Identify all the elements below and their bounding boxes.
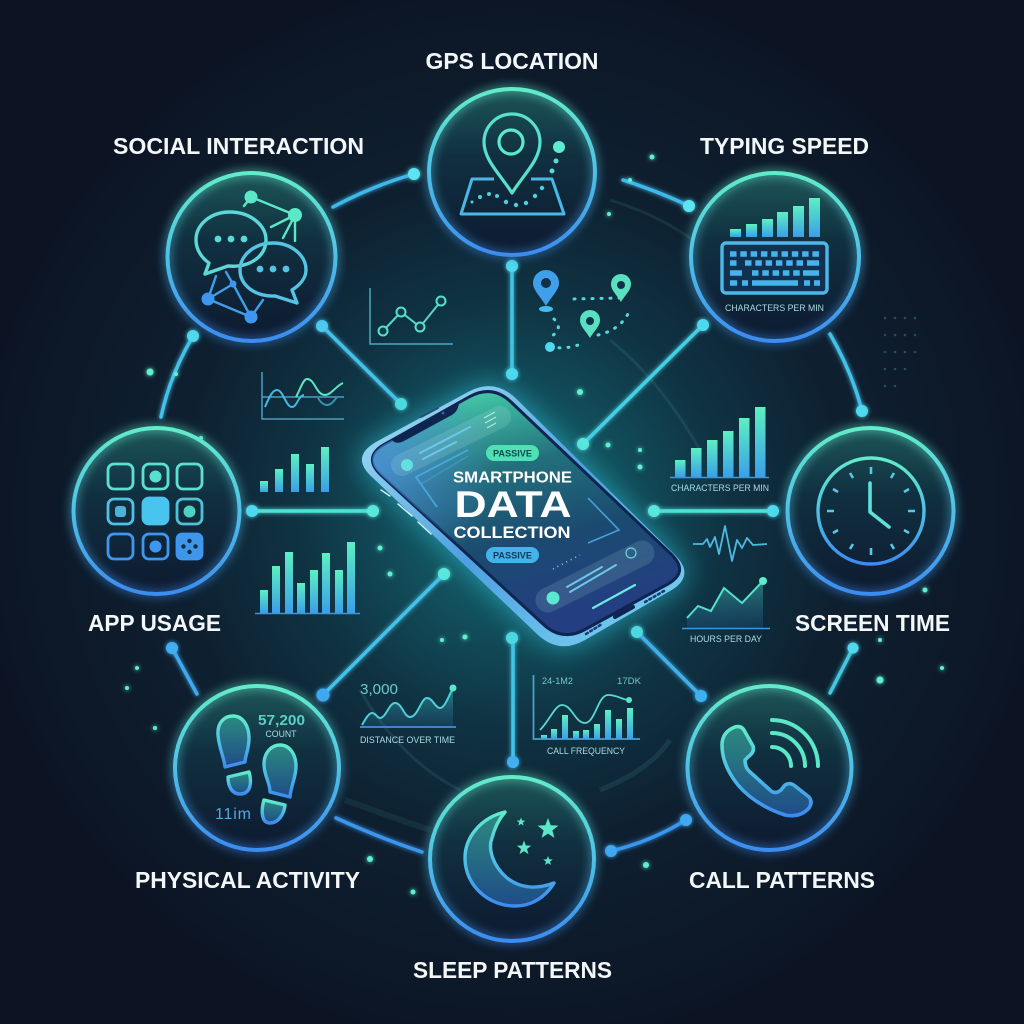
connector lines — [161, 168, 868, 857]
icon: app grid — [108, 464, 202, 559]
connector: app to phone — [246, 505, 379, 517]
panel: physical activity — [135, 686, 360, 893]
chart: distance over time: DISTANCE OVER TIME — [360, 735, 455, 746]
phone title: DATA — [454, 484, 572, 525]
heading: social interaction: SOCIAL INTERACTION — [113, 133, 364, 159]
connector: call to phone — [631, 626, 707, 702]
caption: characters per min: CHARACTERS PER MIN — [725, 303, 824, 314]
chart: distance over time: 3,000 — [360, 681, 398, 698]
stat: distance: 11im — [215, 806, 251, 823]
phone bottom widget — [546, 548, 642, 608]
connector: sleep to phone — [506, 632, 519, 768]
chart: wave chart — [262, 372, 344, 419]
pill: passive (green) — [486, 445, 539, 461]
ring — [688, 686, 852, 850]
connector: call to screen — [830, 642, 858, 693]
ring — [430, 777, 594, 941]
chart: social line chart — [370, 288, 453, 344]
stat: count — [258, 712, 305, 740]
connector: social to phone — [316, 320, 407, 410]
heading: typing speed: TYPING SPEED — [700, 133, 869, 159]
panel: app usage — [74, 428, 240, 636]
pill: passive (blue): PASSIVE — [493, 550, 532, 562]
panel: sleep patterns — [413, 777, 612, 983]
connector: typing to screen — [830, 334, 868, 417]
ring — [74, 428, 240, 594]
connector: app to physical — [166, 642, 197, 694]
icon: bars — [730, 198, 820, 237]
connector: physical to sleep — [336, 818, 422, 852]
phone notch — [392, 401, 459, 443]
panel: social interaction — [113, 133, 364, 341]
ring — [429, 89, 595, 255]
phone top widget — [401, 412, 500, 471]
connector: sleep to call — [605, 814, 692, 857]
panel: typing speed — [691, 133, 869, 341]
heading: call patterns: CALL PATTERNS — [689, 867, 875, 893]
heading: physical activity: PHYSICAL ACTIVITY — [135, 867, 360, 893]
connector: app to social — [161, 330, 199, 417]
pill: passive (green): PASSIVE — [493, 448, 532, 460]
connector: physical to phone — [316, 568, 450, 702]
icon: stars — [517, 818, 558, 865]
chart: small bar chart — [260, 447, 329, 492]
heading: GPS location: GPS LOCATION — [426, 48, 598, 74]
chart: distance over time — [360, 681, 456, 746]
ring — [168, 173, 336, 341]
chart: call frequency: 17DK — [617, 676, 642, 687]
chart: call frequency — [534, 675, 642, 757]
phone title: COLLECTION — [454, 524, 570, 542]
icon: chat bubbles and network — [196, 190, 306, 324]
connector: GPS to phone — [506, 260, 518, 380]
chart: large bar chart — [255, 542, 360, 614]
connector: typing to phone — [577, 319, 709, 450]
icon: crescent moon — [465, 812, 554, 906]
heading: sleep patterns: SLEEP PATTERNS — [413, 957, 612, 983]
stat: count: 57,200 — [258, 712, 305, 729]
connector: screen to phone — [648, 505, 779, 517]
heading: screen time: SCREEN TIME — [795, 610, 950, 636]
chart: call frequency: 24-1M2 — [542, 676, 573, 687]
chart: call frequency: CALL FREQUENCY — [547, 746, 626, 757]
phone screen brackets — [416, 450, 619, 569]
phone hardware details — [381, 408, 664, 634]
decorative particles — [125, 154, 944, 894]
connector: social to GPS — [333, 168, 420, 207]
panel: GPS location — [426, 48, 598, 255]
icon: map pin — [461, 114, 565, 214]
icon: keyboard — [722, 243, 827, 293]
chart: route with pins — [533, 270, 631, 352]
central phone — [362, 386, 684, 646]
icon: footprints — [218, 716, 296, 823]
chart: hours per day — [682, 577, 770, 645]
phone frame — [362, 386, 684, 646]
connector: GPS to typing — [623, 180, 695, 212]
faint orbit arcs — [345, 200, 700, 830]
phone screen left tint — [372, 392, 680, 635]
chart: hours per day: HOURS PER DAY — [690, 634, 763, 645]
ring — [788, 428, 954, 594]
dot grid, upper right — [884, 317, 916, 387]
stat: count: COUNT — [266, 729, 297, 740]
phone glow — [362, 386, 684, 646]
ring — [175, 686, 339, 850]
pill: passive (blue) — [486, 547, 539, 563]
chart: characters per minute bars — [670, 407, 769, 494]
chart: characters per minute bars: CHARACTERS PER MIN — [671, 483, 769, 494]
phone title — [453, 470, 572, 542]
panel: call patterns — [688, 686, 875, 893]
phone screen — [372, 392, 680, 635]
chart: pulse line — [693, 526, 767, 561]
icon: phone handset — [722, 720, 818, 816]
icon: clock — [818, 458, 924, 564]
panel: screen time — [788, 428, 954, 636]
phone title: SMARTPHONE — [453, 470, 572, 486]
heading: app usage: APP USAGE — [88, 610, 221, 636]
ring — [691, 173, 859, 341]
